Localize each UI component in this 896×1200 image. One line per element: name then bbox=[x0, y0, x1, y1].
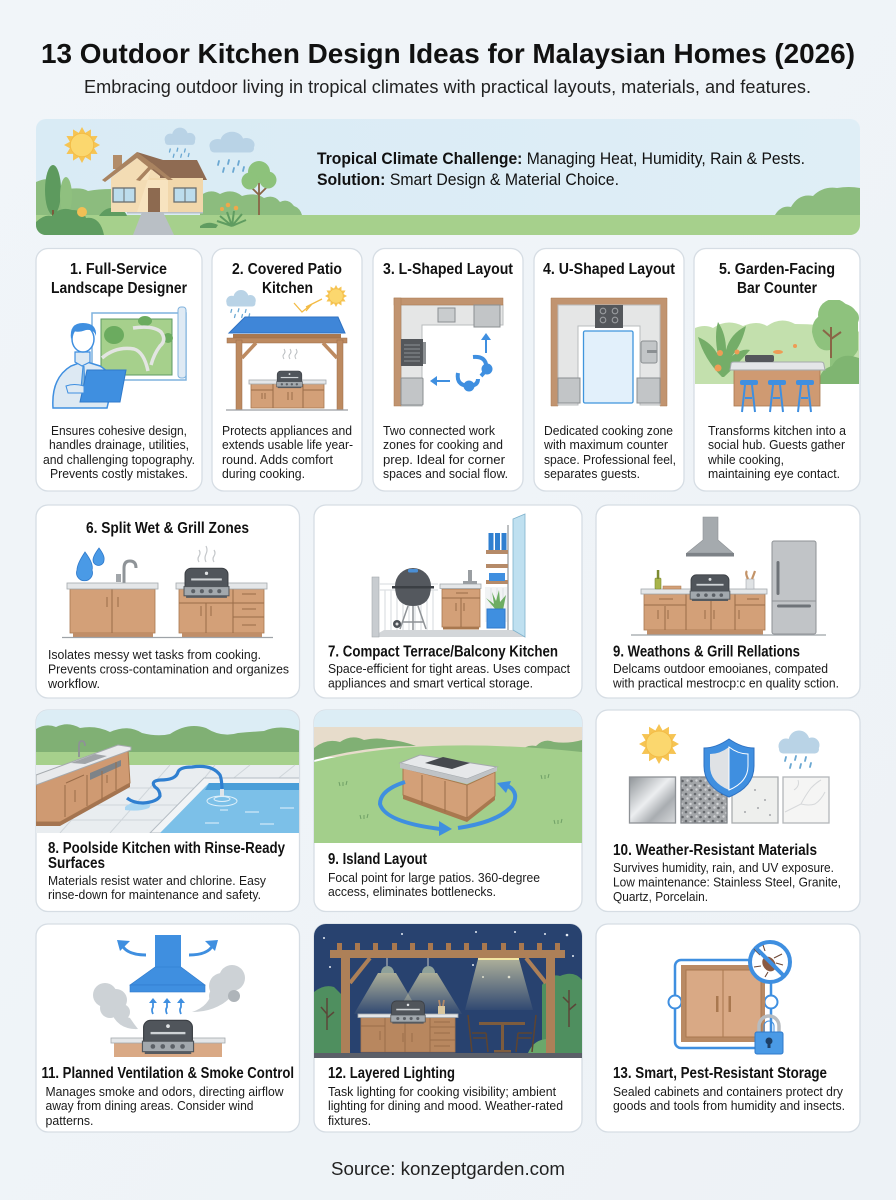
description: Survives humidity, rain, and UV exposure. bbox=[613, 860, 834, 875]
description bbox=[707, 423, 847, 481]
description bbox=[328, 1084, 563, 1128]
description: round. Adds comfort bbox=[222, 452, 333, 467]
banner text: Tropical Climate Challenge: Managing Heat, Humidity, Rain & Pests. bbox=[317, 150, 805, 168]
heading: 11. Planned Ventilation & Smoke Control bbox=[42, 1065, 294, 1082]
description: while cooking, bbox=[707, 452, 784, 467]
illustration: covered patio with grill bbox=[226, 285, 348, 410]
description: space. Professional feel, bbox=[544, 452, 676, 467]
illustration: night pergola with lighting bbox=[314, 924, 582, 1058]
panel: 1 Full-Service Landscape Designer bbox=[36, 248, 202, 491]
description: extends usable life year- bbox=[222, 437, 353, 452]
description: Prevents costly mistakes. bbox=[50, 466, 188, 481]
title: 13 Outdoor Kitchen Design Ideas for Malaysian Homes (2026) bbox=[41, 38, 855, 69]
description: Materials resist water and chlorine. Easy bbox=[48, 873, 266, 888]
heading: 3. L-Shaped Layout bbox=[383, 261, 513, 278]
panel: 13 Smart, Pest-Resistant Storage bbox=[596, 924, 860, 1132]
banner text: Solution: Smart Design & Material Choice. bbox=[317, 171, 619, 189]
description bbox=[543, 423, 676, 481]
description: separates guests. bbox=[544, 466, 640, 481]
heading: 4. U-Shaped Layout bbox=[543, 261, 675, 278]
description: social hub. Guests gather bbox=[708, 437, 846, 452]
description: rinse-down for maintenance and safety. bbox=[48, 887, 261, 902]
description: Task lighting for cooking visibility; ambient bbox=[328, 1084, 556, 1099]
description: Manages smoke and odors, directing airflow bbox=[46, 1084, 284, 1099]
source line: Source: konzeptgarden.com bbox=[331, 1158, 565, 1179]
icon: sun bbox=[64, 127, 100, 163]
description: Low maintenance: Stainless Steel, Granite, bbox=[613, 874, 841, 890]
description: goods and tools from humidity and insects. bbox=[613, 1098, 845, 1113]
description: appliances and smart vertical storage. bbox=[328, 676, 533, 690]
description bbox=[613, 860, 841, 904]
illustration: kitchen with hood and fridge bbox=[631, 517, 826, 635]
illustration: sealed cabinet with pest sign and lock bbox=[668, 942, 790, 1054]
description: and challenging topography. bbox=[43, 452, 195, 467]
description: prep. Ideal for corner bbox=[383, 452, 506, 467]
description: spaces and social flow. bbox=[383, 466, 508, 481]
description bbox=[222, 423, 353, 481]
heading: 7. Compact Terrace/Balcony Kitchen bbox=[328, 644, 558, 660]
heading: 10. Weather-Resistant Materials bbox=[613, 842, 817, 859]
banner: tropical climate challenge bbox=[36, 119, 860, 235]
description bbox=[48, 873, 266, 902]
illustration: poolside kitchen with hose bbox=[36, 710, 300, 833]
illustration: island with circulation arrows bbox=[314, 710, 582, 843]
description: Delcams outdoor emooianes, compated bbox=[613, 661, 828, 676]
panel: 12 Layered Lighting bbox=[314, 924, 582, 1132]
heading bbox=[719, 261, 835, 297]
description: Two connected work bbox=[383, 423, 495, 438]
description bbox=[383, 423, 508, 481]
banner text bbox=[317, 150, 805, 189]
description: zones for cooking and bbox=[383, 437, 503, 452]
icon: small rain cloud bbox=[165, 128, 195, 157]
description: Isolates messy wet tasks from cooking. bbox=[48, 647, 261, 662]
illustration: designer with landscape plan bbox=[53, 307, 186, 408]
icon: large rain cloud bbox=[209, 132, 255, 172]
description: Focal point for large patios. 360-degree bbox=[328, 870, 540, 885]
description: lighting for dining and mood. Weather-rated bbox=[328, 1098, 563, 1113]
description: with maximum counter bbox=[543, 437, 669, 452]
illustration: garden bar counter bbox=[695, 299, 859, 412]
description: Quartz, Porcelain. bbox=[613, 889, 708, 904]
subtitle: Embracing outdoor living in tropical climates with practical layouts, materials, and features. bbox=[84, 77, 811, 97]
description bbox=[46, 1084, 284, 1128]
heading: 6. Split Wet & Grill Zones bbox=[86, 520, 249, 537]
heading: 5. Garden-Facing bbox=[719, 261, 835, 278]
description: away from dining areas. Consider wind bbox=[46, 1098, 254, 1113]
heading: 8. Poolside Kitchen with Rinse-Ready bbox=[48, 840, 285, 857]
illustration: wet zone and grill zone bbox=[62, 546, 273, 638]
panel: 11 Planned Ventilation & Smoke Control bbox=[36, 924, 300, 1132]
heading: 13. Smart, Pest-Resistant Storage bbox=[613, 1065, 827, 1082]
description: with practical mestrocp:c en quality sction. bbox=[612, 676, 839, 690]
panel: 2 Covered Patio Kitchen bbox=[212, 248, 362, 491]
illustration: U-shaped floor plan bbox=[551, 298, 667, 406]
heading: 9. Island Layout bbox=[328, 851, 427, 868]
description: Sealed cabinets and containers protect dry bbox=[613, 1084, 843, 1099]
panel: 4 U-Shaped Layout bbox=[534, 248, 684, 491]
panel: 9 Weathons & Grill Rellations bbox=[596, 505, 860, 698]
heading: Bar Counter bbox=[737, 280, 817, 297]
heading: 12. Layered Lighting bbox=[328, 1065, 455, 1082]
heading bbox=[51, 261, 187, 297]
description: Protects appliances and bbox=[222, 423, 352, 438]
description bbox=[47, 647, 289, 691]
panel: 8 Poolside Kitchen with Rinse-Ready Surfaces bbox=[36, 710, 300, 912]
panel: 10 Weather-Resistant Materials bbox=[596, 710, 860, 912]
description: Ensures cohesive design, bbox=[51, 423, 187, 438]
description bbox=[613, 1084, 845, 1113]
description: Space-efficient for tight areas. Uses compact bbox=[328, 661, 570, 676]
heading: Surfaces bbox=[48, 855, 105, 872]
description bbox=[328, 870, 540, 899]
heading bbox=[232, 261, 342, 297]
heading: Kitchen bbox=[262, 280, 313, 297]
description: Transforms kitchen into a bbox=[708, 423, 847, 438]
description: handles drainage, utilities, bbox=[49, 437, 189, 452]
panel: 5 Garden-Facing Bar Counter bbox=[694, 248, 860, 491]
illustration: L-shaped floor plan bbox=[394, 298, 503, 406]
panel: 6 Split Wet & Grill Zones bbox=[36, 505, 300, 698]
description: access, eliminates bottlenecks. bbox=[328, 884, 496, 899]
description: maintaining eye contact. bbox=[708, 466, 840, 481]
description bbox=[612, 661, 839, 690]
heading: 9. Weathons & Grill Rellations bbox=[613, 644, 800, 660]
heading: Landscape Designer bbox=[51, 280, 187, 297]
illustration: material samples with shield bbox=[630, 724, 829, 823]
banner scene bbox=[36, 119, 860, 235]
heading bbox=[48, 840, 285, 872]
illustration: compact balcony kitchen bbox=[372, 514, 525, 637]
description: workflow. bbox=[47, 676, 100, 691]
description: fixtures. bbox=[328, 1113, 371, 1128]
description: patterns. bbox=[46, 1113, 94, 1128]
description bbox=[328, 661, 570, 690]
description: during cooking. bbox=[222, 466, 305, 481]
heading: 1. Full-Service bbox=[70, 261, 167, 278]
description: Dedicated cooking zone bbox=[544, 423, 673, 438]
heading: 2. Covered Patio bbox=[232, 261, 342, 278]
description bbox=[43, 423, 195, 481]
description: Prevents cross-contamination and organizes bbox=[48, 662, 289, 676]
panel: 3 L-Shaped Layout bbox=[373, 248, 523, 491]
panel: 9 Island Layout bbox=[314, 710, 582, 912]
panel: 7 Compact Terrace/Balcony Kitchen bbox=[314, 505, 582, 698]
illustration: hood with smoke bbox=[93, 935, 245, 1057]
